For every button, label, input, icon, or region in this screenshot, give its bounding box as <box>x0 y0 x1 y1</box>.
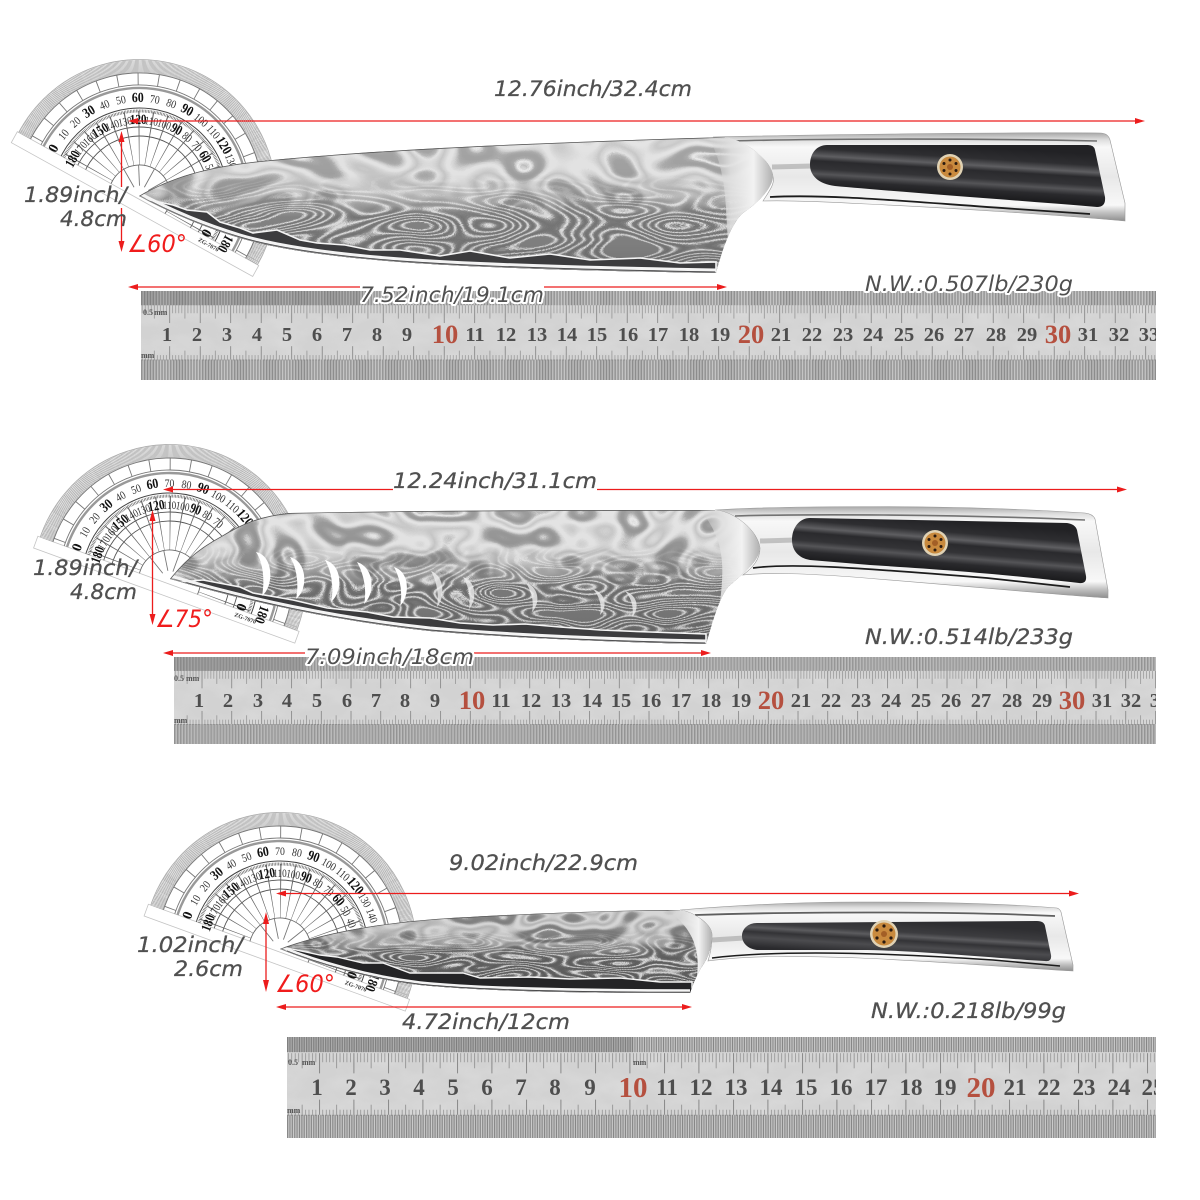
protractor: utility knife: 70 <box>275 845 285 858</box>
protractor: chef knife: 170 <box>72 140 90 158</box>
ruler: chef knife: 3 <box>222 324 232 346</box>
protractor: chef knife: 10 <box>56 127 72 143</box>
protractor: utility knife: 130 <box>246 871 263 887</box>
protractor: utility knife: 70 <box>321 884 335 899</box>
protractor: santoku knife: 180 <box>252 604 273 626</box>
ruler: utility knife: 23 <box>1072 1075 1096 1100</box>
protractor: chef knife: 120 <box>130 112 147 127</box>
ruler: utility knife: mm <box>633 1058 647 1067</box>
knife: utility knife <box>270 900 1073 1000</box>
protractor: utility knife: 30 <box>207 863 226 883</box>
protractor: utility knife: 170 <box>207 903 224 921</box>
protractor: utility knife: ZG-7070 <box>344 980 367 994</box>
ruler: santoku knife: 14 <box>582 690 602 712</box>
protractor: utility knife: 80 <box>310 877 324 892</box>
protractor: utility knife: 140 <box>363 907 380 925</box>
ruler: chef knife: 14 <box>557 324 577 346</box>
ruler: chef knife: 8 <box>372 324 382 346</box>
protractor: utility knife: 10 <box>188 893 204 908</box>
label: net weight: N.W.:0.507lb/230g <box>865 272 1073 297</box>
label: blade height: 1.89inch/ <box>33 556 140 581</box>
ruler: chef knife: 28 <box>986 324 1006 346</box>
ruler: chef knife: 30 <box>1045 319 1071 349</box>
ruler: utility knife: 11 <box>656 1075 678 1100</box>
ruler: santoku knife: 2 <box>223 690 233 712</box>
protractor: santoku knife: 120 <box>147 497 166 515</box>
protractor: chef knife: 100 <box>191 111 210 130</box>
protractor: santoku knife: 80 <box>180 478 192 492</box>
ruler: santoku knife: 31 <box>1092 690 1112 712</box>
protractor: utility knife: 80 <box>291 846 303 860</box>
ruler: chef knife: 4 <box>252 324 262 346</box>
ruler: santoku knife: 10 <box>459 685 485 715</box>
ruler: utility knife: 15 <box>794 1075 818 1100</box>
protractor: chef knife: 60 <box>195 148 215 165</box>
total length arrow: utility knife <box>276 890 1079 896</box>
protractor: santoku knife: 20 <box>87 511 103 526</box>
knife: chef knife <box>130 130 1125 280</box>
ruler: utility knife: 9 <box>584 1075 596 1100</box>
protractor: chef knife: 70 <box>188 139 204 154</box>
protractor: chef knife: 130 <box>222 152 239 170</box>
handle: santoku knife <box>715 507 1108 598</box>
ruler: utility knife: 16 <box>830 1075 852 1100</box>
ruler: utility knife: 25 <box>1142 1075 1164 1100</box>
protractor: utility knife: 180 <box>362 972 384 994</box>
label: total length: 12.24inch/31.1cm <box>393 469 597 494</box>
ruler: chef knife: 24 <box>863 324 883 346</box>
ruler: chef knife: 9 <box>402 324 412 346</box>
label: blade length: 7.52inch/19.1cm <box>360 283 544 308</box>
ruler: santoku knife: 9 <box>430 690 440 712</box>
ruler: chef knife: 13 <box>527 324 547 346</box>
ruler: utility knife: 17 <box>864 1075 888 1100</box>
protractor: utility knife: 0 <box>180 910 197 922</box>
ruler: santoku knife: 20 <box>758 685 784 715</box>
protractor: chef knife: 60 <box>132 89 144 105</box>
ruler: utility knife: mm <box>302 1058 316 1067</box>
ruler: chef knife: 32 <box>1109 324 1129 346</box>
protractor: chef knife: 0 <box>197 226 214 239</box>
ruler: utility knife: 7 <box>515 1075 527 1100</box>
ruler: santoku knife: 1 <box>194 690 204 712</box>
ruler: santoku knife: 11 <box>491 690 511 712</box>
ruler: chef knife: 1 <box>162 324 172 346</box>
ruler: chef knife: 18 <box>679 324 699 346</box>
protractor: santoku knife: 0 <box>232 601 249 613</box>
ruler: utility knife: 18 <box>900 1075 922 1100</box>
blade height arrow: utility knife <box>263 912 269 992</box>
ruler: chef knife: 2 <box>192 324 202 346</box>
ruler: santoku knife: 8 <box>400 690 410 712</box>
protractor: chef knife: 110 <box>203 123 222 142</box>
protractor: utility knife: 40 <box>343 917 358 930</box>
ruler: santoku knife: 30 <box>1059 685 1085 715</box>
ruler: chef knife: 26 <box>924 324 944 346</box>
blade: santoku knife <box>170 510 760 644</box>
protractor: chef knife: 50 <box>115 93 127 108</box>
protractor: chef knife: ZG-7070 <box>197 237 219 254</box>
protractor: santoku knife: 90 <box>195 478 212 498</box>
ruler: santoku knife: 22 <box>821 690 841 712</box>
ruler: santoku knife: 6 <box>342 690 352 712</box>
ruler: santoku knife: mm <box>186 674 200 683</box>
ruler: chef knife: 21 <box>771 324 791 346</box>
protractor: chef knife: 90 <box>168 120 185 139</box>
protractor: chef knife: 160 <box>81 130 100 149</box>
protractor: santoku knife: 150 <box>109 511 132 534</box>
protractor: utility knife: 140 <box>234 876 252 893</box>
protractor: utility knife: 100 <box>285 868 301 883</box>
protractor: utility knife <box>144 812 414 1012</box>
protractor: santoku knife: 140 <box>123 508 141 525</box>
label: blade height: 4.8cm <box>70 580 137 605</box>
protractor: santoku knife: 110 <box>222 497 242 516</box>
protractor: utility knife: 130 <box>355 891 373 910</box>
ruler: utility knife: 22 <box>1038 1075 1060 1100</box>
ruler: utility knife: 20 <box>966 1072 996 1104</box>
blade: utility knife <box>280 910 712 993</box>
protractor: chef knife: 90 <box>178 100 197 119</box>
ruler: santoku knife: 23 <box>851 690 871 712</box>
ruler: chef knife: 6 <box>312 324 322 346</box>
ruler: santoku knife: 3 <box>253 690 263 712</box>
ruler: santoku knife: 24 <box>881 690 901 712</box>
protractor: chef knife: 110 <box>144 115 159 129</box>
ruler: santoku knife: 32 <box>1121 690 1141 712</box>
ruler: utility knife: 24 <box>1108 1075 1131 1100</box>
ruler: santoku knife: 7 <box>371 690 381 712</box>
protractor: santoku knife: 130 <box>135 503 152 519</box>
ruler: utility knife: mm <box>287 1106 301 1115</box>
ruler: utility knife: 14 <box>760 1075 783 1100</box>
protractor: utility knife: 90 <box>305 846 322 866</box>
label: blade height: 1.02inch/ <box>137 933 246 958</box>
protractor: santoku knife: 100 <box>175 500 190 515</box>
protractor: santoku knife: 10 <box>77 525 93 540</box>
protractor: santoku knife: 180 <box>88 544 108 565</box>
protractor: chef knife: 40 <box>98 97 112 113</box>
ruler: santoku knife: 5 <box>312 690 322 712</box>
ruler: santoku knife: 19 <box>731 690 751 712</box>
protractor: utility knife: 90 <box>298 868 314 886</box>
ruler: chef knife: mm <box>154 308 168 317</box>
blade: chef knife <box>139 137 773 273</box>
protractor: utility knife: 100 <box>319 856 338 874</box>
protractor: utility knife: 120 <box>257 865 276 883</box>
ruler: chef knife: 0.5 <box>143 308 153 317</box>
label: blade height: 2.6cm <box>174 957 243 982</box>
label: total length: 9.02inch/22.9cm <box>449 851 638 876</box>
protractor: chef knife: 140 <box>104 118 121 134</box>
total length arrow: chef knife <box>128 118 1145 124</box>
ruler: santoku knife: 18 <box>701 690 721 712</box>
protractor: chef knife: 100 <box>155 117 172 133</box>
protractor: santoku knife <box>33 444 303 644</box>
ruler: utility knife: 19 <box>934 1075 956 1100</box>
protractor: chef knife: 0 <box>46 142 62 155</box>
protractor: chef knife: 180 <box>62 148 83 170</box>
ruler: utility knife: 10 <box>618 1072 648 1104</box>
ruler: utility knife: 12 <box>690 1075 712 1100</box>
label: tip angle: ∠75° <box>155 605 213 633</box>
label: blade height: 4.8cm <box>60 207 127 232</box>
protractor: chef knife: 30 <box>79 101 98 121</box>
ruler: chef knife: 27 <box>954 324 974 346</box>
protractor: santoku knife: 160 <box>103 524 121 542</box>
ruler: chef knife: 15 <box>587 324 607 346</box>
protractor: chef knife: 130 <box>117 115 133 130</box>
ruler: chef knife: 17 <box>648 324 668 346</box>
protractor: santoku knife: 120 <box>233 505 257 529</box>
label: blade height <box>24 183 130 232</box>
blade height arrow: santoku knife <box>150 510 156 625</box>
handle: chef knife <box>713 133 1125 221</box>
label: tip angle: ∠60° <box>127 230 187 258</box>
ruler: chef knife: 22 <box>802 324 822 346</box>
ruler: chef knife: 20 <box>738 319 764 349</box>
protractor: utility knife: 110 <box>273 868 287 880</box>
ruler: utility knife: 2 <box>345 1075 357 1100</box>
ruler: utility knife: 0.5 <box>288 1058 298 1067</box>
ruler: chef knife: 5 <box>282 324 292 346</box>
label: net weight: N.W.:0.514lb/233g <box>865 625 1073 650</box>
protractor: santoku knife: 0 <box>70 542 86 554</box>
protractor: santoku knife: 100 <box>209 488 228 506</box>
ruler: santoku knife: 28 <box>1002 690 1022 712</box>
protractor: utility knife: 150 <box>219 879 242 902</box>
ruler: santoku knife: 13 <box>551 690 571 712</box>
protractor: utility knife: 160 <box>214 892 232 910</box>
ruler: chef knife: 11 <box>465 324 485 346</box>
ruler: chef knife: 29 <box>1017 324 1037 346</box>
protractor: chef knife: 70 <box>149 93 161 107</box>
ruler: santoku knife: 25 <box>911 690 931 712</box>
ruler: chef knife: 23 <box>833 324 853 346</box>
ruler: santoku knife: 21 <box>791 690 811 712</box>
label: blade length: 7:09inch/18cm <box>305 645 474 670</box>
protractor: chef knife: 180 <box>215 232 237 256</box>
ruler: santoku knife <box>174 650 1200 750</box>
label: net weight: N.W.:0.218lb/99g <box>871 999 1066 1024</box>
ruler: chef knife: mm <box>141 351 155 360</box>
ruler: utility knife: 1 <box>311 1075 323 1100</box>
dimples: santoku knife <box>256 552 637 617</box>
ruler: chef knife <box>141 285 1200 385</box>
protractor: santoku knife: 80 <box>200 509 214 524</box>
label: tip angle: ∠60° <box>275 970 335 998</box>
protractor: chef knife: 80 <box>164 96 178 112</box>
blade length arrow: chef knife <box>128 284 727 290</box>
ruler: utility knife: 5 <box>447 1075 459 1100</box>
ruler: chef knife: 12 <box>496 324 516 346</box>
protractor: chef knife <box>10 59 272 277</box>
protractor: santoku knife: 170 <box>96 535 113 553</box>
protractor: utility knife: 40 <box>224 857 239 873</box>
ruler: utility knife: 3 <box>379 1075 391 1100</box>
ruler: santoku knife: mm <box>174 716 188 725</box>
ruler: santoku knife: 16 <box>641 690 661 712</box>
label: blade height: 1.89inch/ <box>24 183 130 208</box>
ruler: utility knife: 8 <box>549 1075 561 1100</box>
ruler: utility knife: 21 <box>1004 1075 1026 1100</box>
label: blade height <box>33 556 140 605</box>
protractor: santoku knife: 110 <box>163 500 176 512</box>
blade length arrow: santoku knife <box>163 650 711 656</box>
protractor: chef knife: 20 <box>68 115 84 131</box>
ruler: santoku knife: 0.5 <box>174 674 184 683</box>
protractor: utility knife: 120 <box>344 873 368 897</box>
ruler: chef knife: 19 <box>710 324 730 346</box>
label: total length: 12.76inch/32.4cm <box>494 77 692 102</box>
protractor: santoku knife: 30 <box>96 495 116 515</box>
blade height arrow: chef knife <box>118 131 124 252</box>
ruler: chef knife: 16 <box>618 324 638 346</box>
protractor: chef knife: 150 <box>89 120 111 141</box>
ruler: chef knife: 33 <box>1139 324 1159 346</box>
protractor: santoku knife: 90 <box>188 500 204 518</box>
ruler: santoku knife: 27 <box>971 690 991 712</box>
protractor: santoku knife: 50 <box>129 482 143 497</box>
ruler: chef knife: 10 <box>432 319 458 349</box>
protractor: utility knife: 60 <box>329 891 348 909</box>
ruler: santoku knife: 12 <box>521 690 541 712</box>
protractor: utility knife: 110 <box>333 865 352 884</box>
blade length arrow: utility knife <box>276 1004 692 1010</box>
ruler: santoku knife: 29 <box>1032 690 1052 712</box>
ruler: santoku knife: 4 <box>282 690 292 712</box>
protractor: utility knife: 50 <box>240 850 254 865</box>
label: blade length: 4.72inch/12cm <box>402 1010 570 1035</box>
protractor: utility knife: 60 <box>256 843 270 861</box>
protractor: santoku knife: 70 <box>165 477 174 490</box>
protractor: santoku knife: 40 <box>113 489 128 505</box>
knife: santoku knife <box>160 500 1108 650</box>
ruler: santoku knife: 33 <box>1150 690 1170 712</box>
protractor: utility knife: 50 <box>337 905 352 919</box>
ruler: utility knife: 6 <box>481 1075 493 1100</box>
protractor: chef knife: 80 <box>179 130 194 146</box>
label: blade height <box>137 933 246 982</box>
protractor: utility knife: 20 <box>197 879 214 894</box>
ruler: chef knife: 31 <box>1078 324 1098 346</box>
handle: utility knife <box>680 902 1073 971</box>
ruler: santoku knife: 26 <box>941 690 961 712</box>
ruler: santoku knife: 15 <box>611 690 631 712</box>
protractor: chef knife: 50 <box>202 163 217 176</box>
protractor: santoku knife: 70 <box>210 516 225 531</box>
ruler: utility knife: 13 <box>724 1075 748 1100</box>
ruler: utility knife <box>287 1030 1200 1145</box>
protractor: santoku knife: ZG-7070 <box>233 612 257 626</box>
ruler: chef knife: 25 <box>894 324 914 346</box>
protractor: santoku knife: 60 <box>145 475 160 493</box>
ruler: santoku knife: 17 <box>671 690 691 712</box>
protractor: chef knife: 120 <box>213 133 236 157</box>
protractor: utility knife: 0 <box>343 969 359 981</box>
total length arrow: santoku knife <box>163 486 1127 492</box>
ruler: chef knife: 7 <box>342 324 352 346</box>
ruler: utility knife: 4 <box>413 1075 425 1100</box>
protractor: utility knife: 180 <box>198 912 218 933</box>
